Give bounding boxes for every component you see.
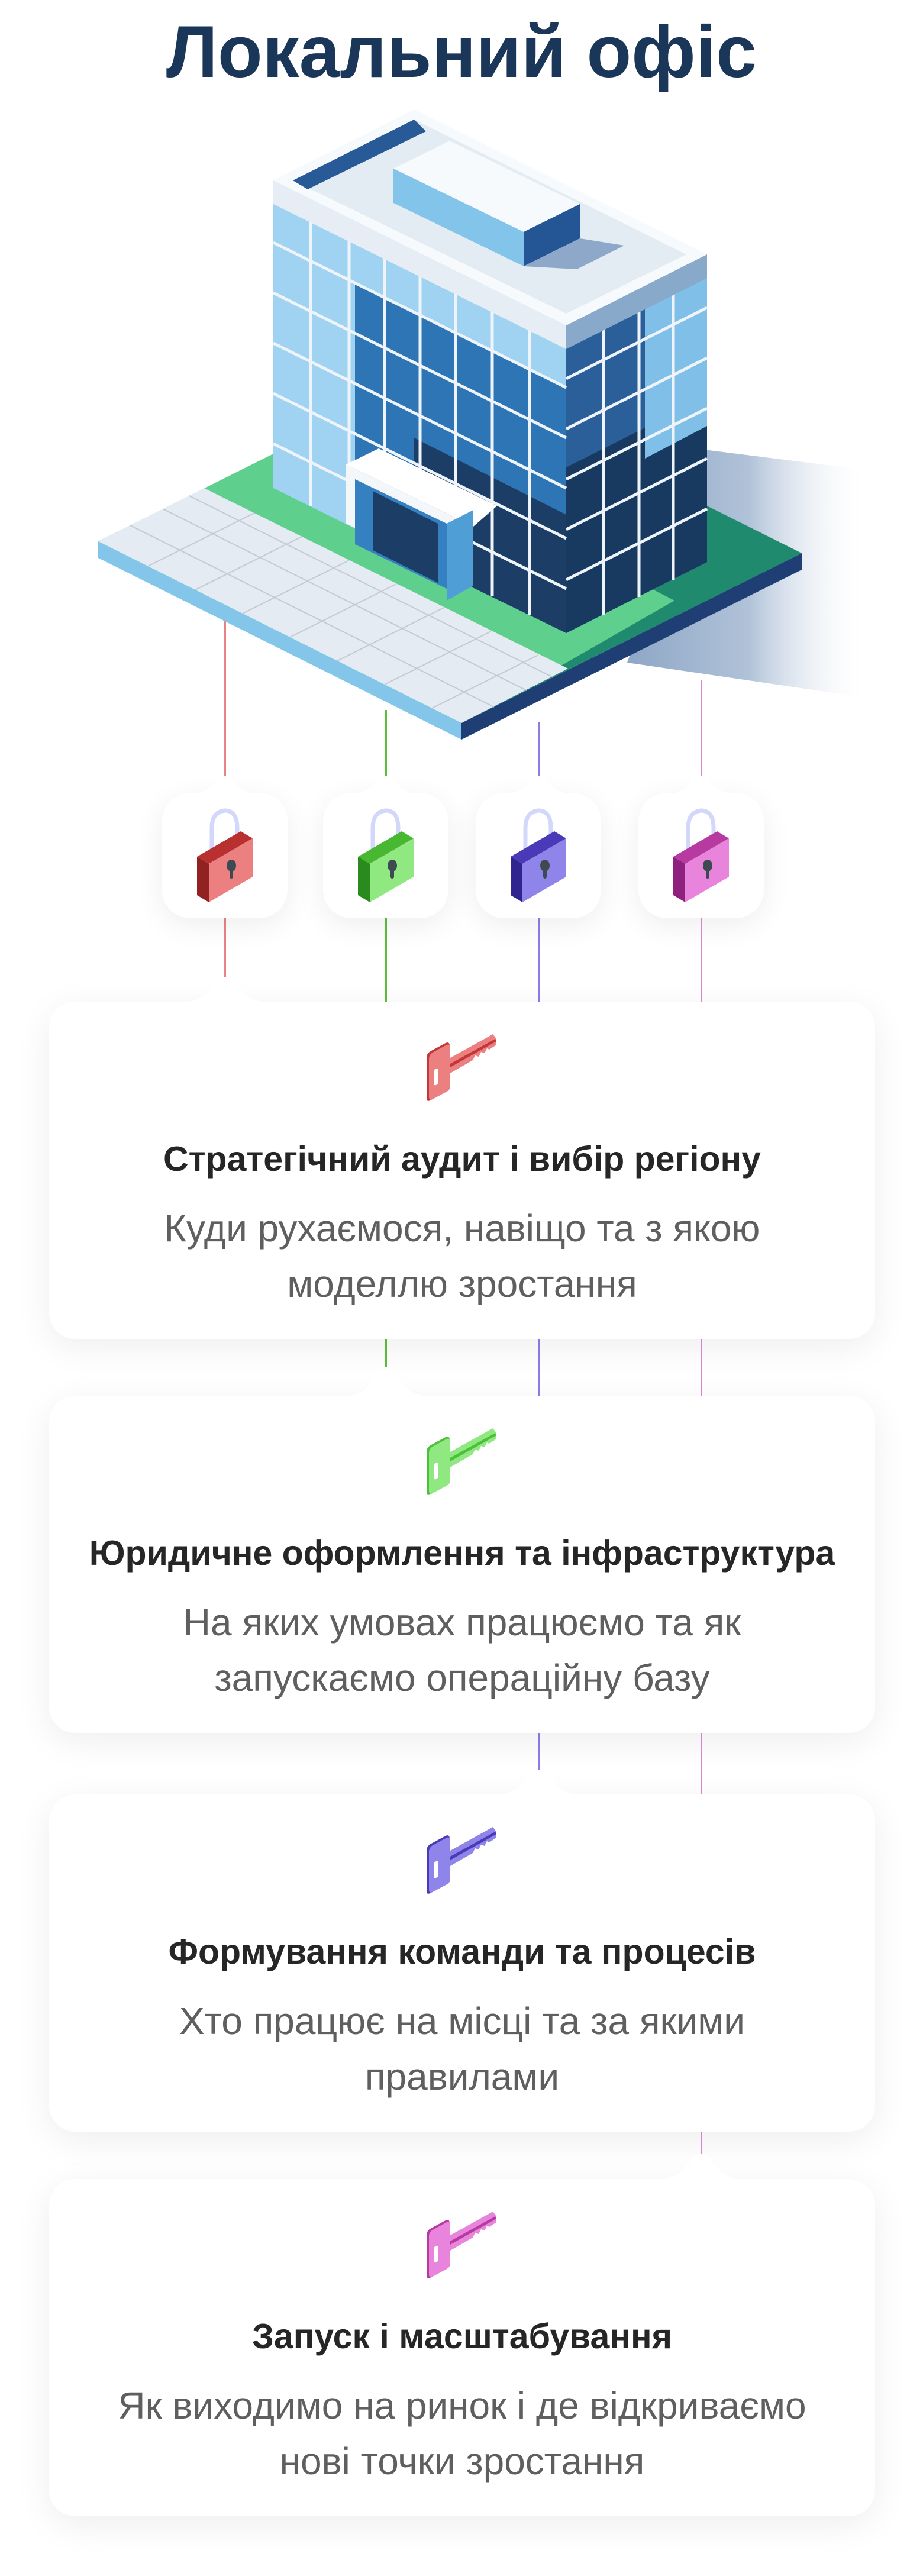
icon: green key — [427, 1428, 496, 1495]
card 1 title: Стратегічний аудит і вибір регіону — [163, 1139, 761, 1179]
shadow — [627, 450, 870, 698]
card 3 description — [179, 2000, 745, 2098]
lock 2 green — [323, 793, 448, 918]
card 4 description: Як виходимо на ринок і де відкриваємо — [118, 2384, 806, 2427]
card 4 description: нові точки зростання — [280, 2440, 644, 2483]
card 2 description — [183, 1601, 741, 1699]
card 2 title: Юридичне оформлення та інфраструктура — [89, 1534, 835, 1573]
card 1 description — [164, 1207, 760, 1305]
lock 1 red — [162, 793, 288, 918]
card 2 description: На яких умовах працюємо та як — [183, 1601, 741, 1644]
entrance — [346, 464, 473, 586]
lock 4 pink — [638, 793, 764, 918]
lock 3 purple — [476, 793, 601, 918]
title: Локальний офіс — [166, 11, 757, 93]
building body — [273, 109, 707, 633]
card 2 description: запускаємо операційну базу — [214, 1657, 710, 1699]
card 4 title: Запуск і масштабування — [252, 2317, 672, 2356]
card 1 description: моделлю зростання — [287, 1263, 637, 1305]
card 4 description — [118, 2384, 806, 2483]
icon: purple key — [427, 1827, 496, 1894]
building illustration — [98, 120, 831, 740]
icon: pink key — [427, 2212, 496, 2278]
card 1 description: Куди рухаємося, навіщо та з якою — [164, 1207, 760, 1250]
card 3 — [49, 1794, 875, 2132]
card 4 — [49, 2179, 875, 2516]
card 3 title: Формування команди та процесів — [169, 1932, 756, 1971]
card 1 — [49, 1002, 875, 1339]
card 3 description: правилами — [365, 2055, 559, 2098]
notches above lock boxes — [224, 776, 702, 793]
icon: red key — [427, 1034, 496, 1101]
card 3 description: Хто працює на місці та за якими — [179, 2000, 745, 2042]
card 2 — [49, 1396, 875, 1733]
base plate — [98, 372, 802, 740]
